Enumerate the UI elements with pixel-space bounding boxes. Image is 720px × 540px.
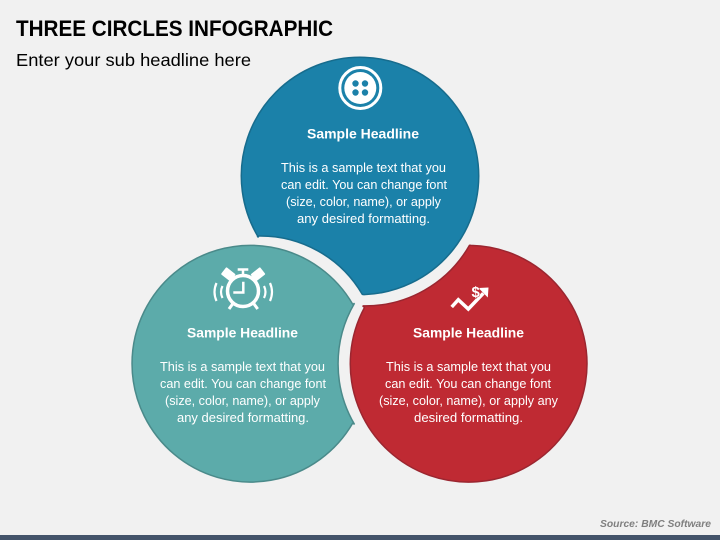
footer bar xyxy=(0,535,720,540)
panel: red circle xyxy=(350,245,587,482)
red body text: (size, color, name), or apply any xyxy=(379,394,559,408)
blue body text xyxy=(281,161,448,226)
teal body text: can edit. You can change font xyxy=(160,377,327,391)
red headline: Sample Headline xyxy=(413,326,524,340)
icon: button xyxy=(340,68,381,108)
teal body text: This is a sample text that you xyxy=(160,360,325,374)
teal body text: any desired formatting. xyxy=(177,411,309,425)
blue circle shape xyxy=(241,57,479,295)
subtitle: Enter your sub headline here xyxy=(16,50,251,70)
title: THREE CIRCLES INFOGRAPHIC xyxy=(16,16,333,41)
icon: alarm clock xyxy=(214,267,272,309)
blue body text: any desired formatting. xyxy=(297,212,430,226)
blue body text: (size, color, name), or apply xyxy=(286,195,442,209)
blue body text: can edit. You can change font xyxy=(281,178,448,192)
icon: rising arrow with dollar xyxy=(452,284,488,309)
teal headline: Sample Headline xyxy=(187,326,298,340)
teal body text xyxy=(160,360,327,425)
source note: Source: BMC Software xyxy=(600,519,711,530)
red circle shape xyxy=(350,245,587,482)
teal circle shape xyxy=(132,245,354,482)
blue body text: This is a sample text that you xyxy=(281,161,446,175)
icon: rising arrow with dollar: $ xyxy=(472,284,480,301)
panel: blue circle xyxy=(241,57,479,295)
red body text xyxy=(379,360,559,425)
red body text: This is a sample text that you xyxy=(386,360,551,374)
blue headline: Sample Headline xyxy=(307,126,420,142)
panel: teal circle xyxy=(132,245,354,482)
red body text: desired formatting. xyxy=(414,411,523,425)
teal body text: (size, color, name), or apply xyxy=(165,394,321,408)
red body text: can edit. You can change font xyxy=(385,377,552,391)
